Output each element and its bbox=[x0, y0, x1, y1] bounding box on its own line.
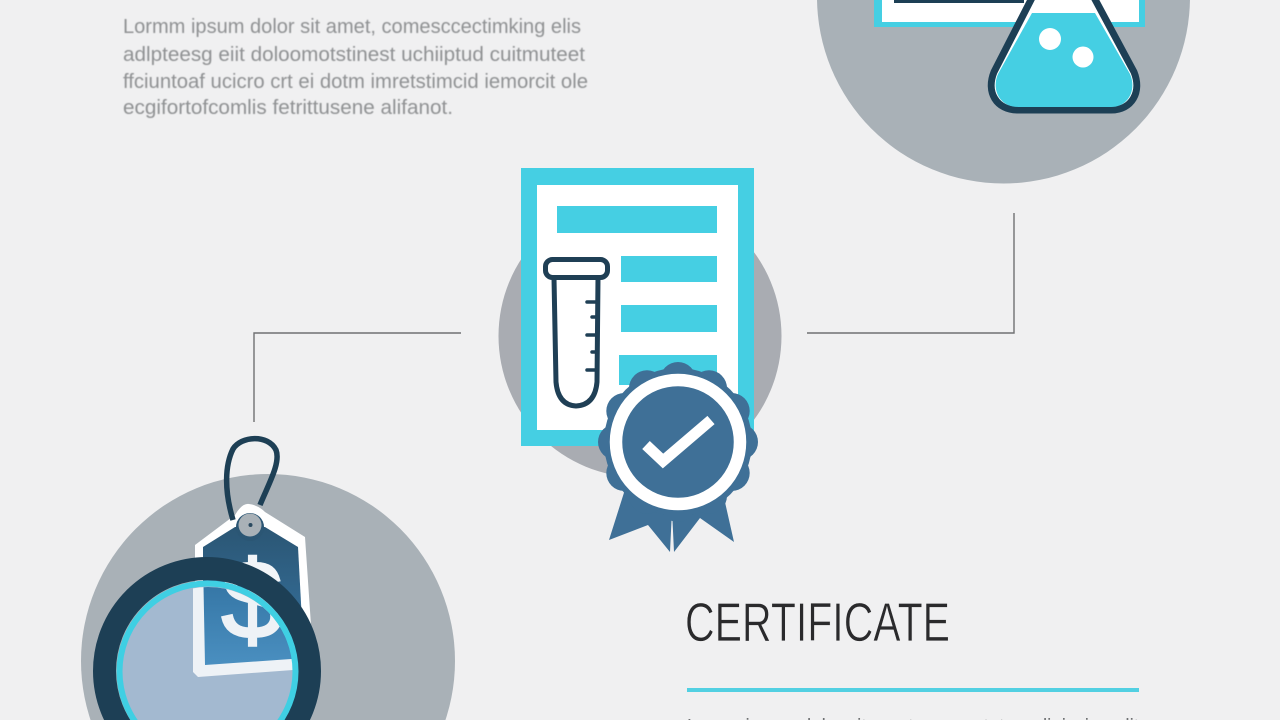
tag seen through lens bbox=[193, 587, 292, 677]
paragraph: intro text: ffciuntoaf ucicro crt ei dotm imretstimcid iemorcit ole bbox=[123, 71, 588, 93]
panel: certificate icon bbox=[498, 168, 782, 552]
icon: magnifying glass bbox=[104, 539, 320, 720]
ring bbox=[104, 568, 310, 720]
dollar sign: $ bbox=[221, 539, 283, 662]
paragraph: intro text: Lormm ipsum dolor sit amet, comesccectimking elis bbox=[123, 16, 581, 38]
icon: approval badge bbox=[598, 362, 758, 552]
tag string bbox=[227, 439, 277, 520]
paragraph: intro text bbox=[123, 16, 588, 119]
seal ring bbox=[616, 380, 740, 504]
grey circle background bbox=[498, 194, 782, 478]
check mark bbox=[646, 420, 711, 461]
underline accent bbox=[687, 688, 1139, 692]
grey circle background bbox=[81, 474, 455, 720]
icon: price tag bbox=[195, 439, 312, 676]
heading: certificate: CERTIFICATE bbox=[685, 591, 950, 653]
eyelet bbox=[236, 513, 264, 541]
connector: flask to certificate bbox=[807, 213, 1014, 333]
icon: test tube bbox=[546, 260, 608, 406]
ribbon tails bbox=[609, 480, 734, 552]
paragraph: intro text: adlpteesg eiit doloomotstinest uchiiptud cuitmuteet bbox=[123, 44, 585, 66]
grey circle background bbox=[817, 0, 1190, 184]
paragraph: intro text: ecgifortofcomlis fetrittusene alifanot. bbox=[123, 97, 453, 119]
icon: flask bbox=[991, 0, 1137, 110]
lens bbox=[120, 584, 296, 720]
connector: certificate to price tag bbox=[254, 333, 461, 422]
panel: price inspection icon bbox=[81, 439, 455, 720]
scalloped seal bbox=[598, 362, 758, 522]
inner cyan ring bbox=[120, 584, 296, 720]
panel: laboratory test icon bbox=[817, 0, 1190, 184]
tag seen through lens: $ bbox=[221, 539, 283, 662]
document bbox=[521, 168, 754, 446]
document edge bbox=[874, 0, 1145, 27]
